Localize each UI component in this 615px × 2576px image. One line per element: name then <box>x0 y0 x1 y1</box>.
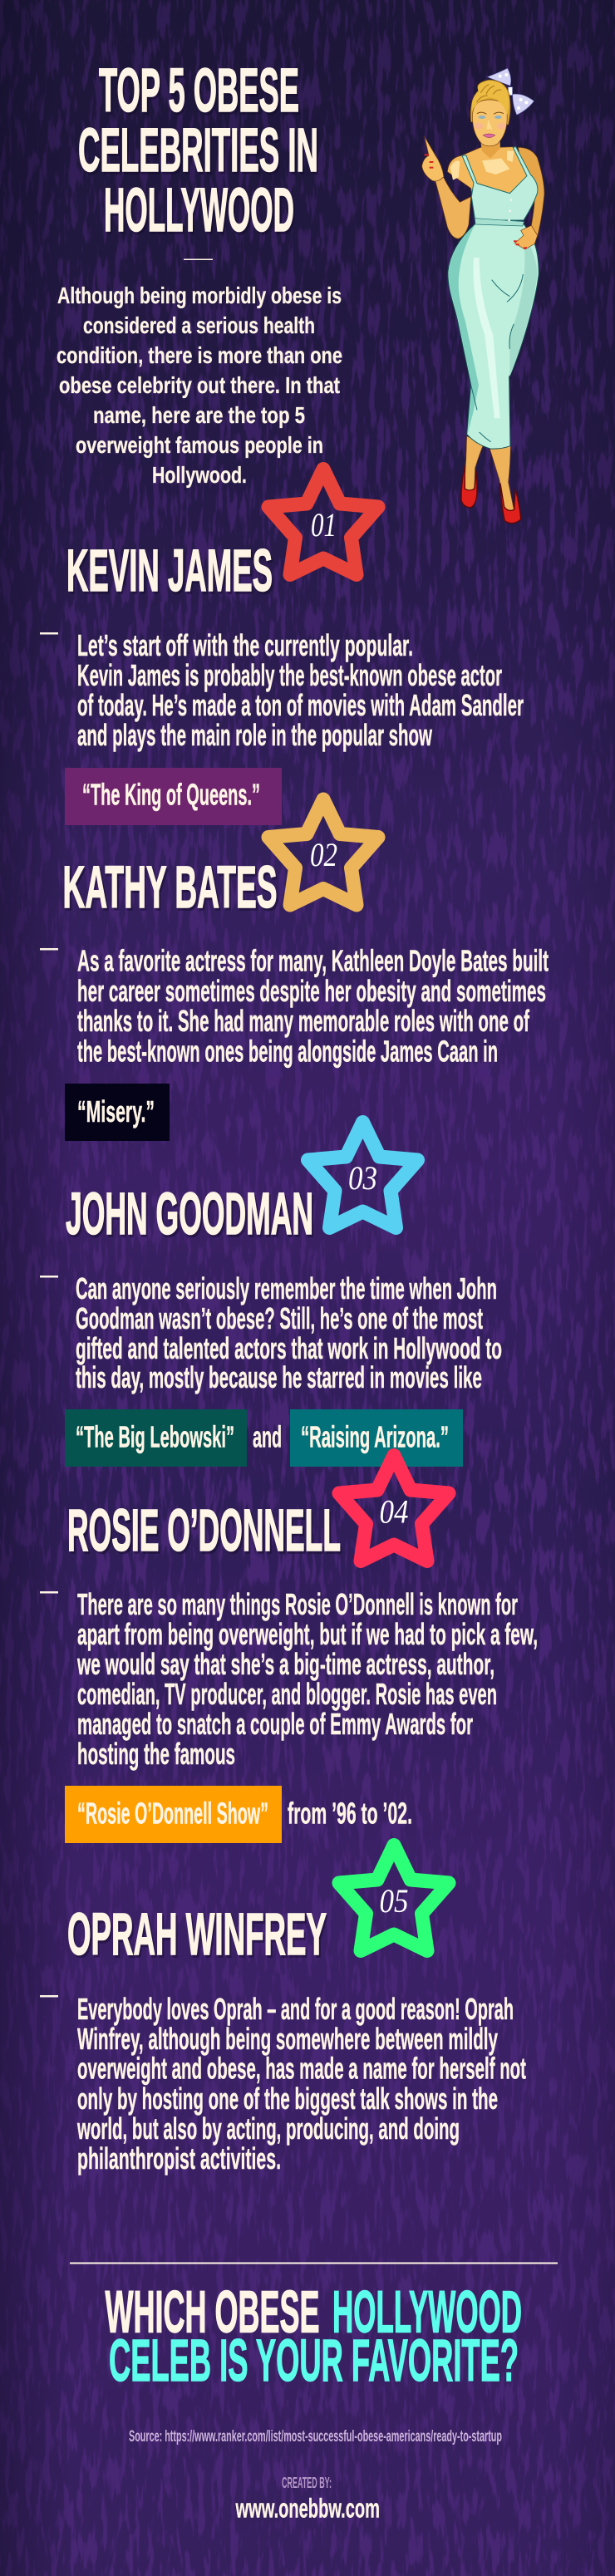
highlight: “Misery.” <box>77 1094 155 1128</box>
title: TOP 5 OBESE <box>99 56 299 125</box>
belt <box>475 219 524 226</box>
illustration: pin-up woman <box>422 68 544 524</box>
heading: KATHY BATES <box>63 855 278 921</box>
buttons <box>508 199 512 221</box>
intro text: condition, there is more than one <box>57 342 342 368</box>
shoes <box>461 465 521 524</box>
star 02 <box>268 799 378 905</box>
body: philanthropist activities. <box>77 2141 281 2175</box>
star 03 <box>308 1122 417 1228</box>
text: CREATED BY: <box>282 2475 332 2491</box>
hair front <box>471 81 509 115</box>
highlight: The Big Lebowski <box>65 1409 247 1467</box>
bow dots <box>499 73 528 110</box>
closing divider <box>70 2262 558 2264</box>
star 05 <box>339 1845 449 1951</box>
arm: hand on hip <box>518 147 544 237</box>
intro text <box>57 283 342 488</box>
nails <box>425 154 527 248</box>
heading: OPRAH WINFREY <box>67 1902 327 1968</box>
star 03: 03 <box>348 1159 377 1197</box>
star 04 <box>339 1456 449 1561</box>
intro text: Hollywood. <box>152 462 247 488</box>
heading: JOHN GOODMAN <box>66 1182 313 1247</box>
bodice <box>462 147 538 220</box>
hair back <box>470 80 510 125</box>
body <box>76 1271 502 1394</box>
body <box>76 1992 526 2175</box>
arm: raised <box>435 177 471 238</box>
skirt folds <box>471 274 523 442</box>
star 01 <box>268 469 378 575</box>
dash <box>40 632 58 635</box>
bow <box>487 68 534 115</box>
dash <box>40 1591 58 1594</box>
connector word: and <box>253 1419 282 1454</box>
intro text: Although being morbidly obese is <box>57 283 342 308</box>
closing question: WHICH OBESE <box>105 2280 319 2345</box>
highlight <box>65 1084 170 1141</box>
intro text: overweight famous people in <box>76 432 323 458</box>
heading: KEVIN JAMES <box>66 538 273 604</box>
trailing text: from ’96 to ’02. <box>288 1797 412 1830</box>
section 5: Oprah Winfrey <box>40 1845 526 2175</box>
highlight: Raising Arizona <box>290 1409 463 1467</box>
dash <box>40 1276 58 1278</box>
highlight: Raising Arizona: “Raising Arizona.” <box>301 1419 449 1454</box>
face <box>473 100 507 146</box>
website: www.onebbw.com <box>235 2493 380 2523</box>
intro text: obese celebrity out there. In that <box>59 372 340 398</box>
title divider <box>184 259 213 260</box>
closing question <box>105 2280 522 2394</box>
section 1: Kevin James <box>40 469 524 825</box>
skirt <box>448 224 539 449</box>
torso <box>447 147 530 202</box>
star 04: 04 <box>379 1492 409 1531</box>
face details <box>475 112 506 138</box>
section 4: Rosie O'Donnell <box>40 1456 538 1843</box>
star 02: 02 <box>310 836 337 873</box>
intro text: name, here are the top 5 <box>93 402 305 428</box>
hair strands <box>476 85 501 102</box>
body: hosting the famous <box>77 1737 235 1771</box>
text: CELEBRITIES IN <box>78 116 318 184</box>
raised hand <box>422 136 444 181</box>
hip hand <box>514 225 538 249</box>
star 01: 01 <box>311 506 337 543</box>
dash <box>40 1995 58 1998</box>
body <box>76 1587 538 1771</box>
title <box>78 56 318 244</box>
section 2: Kathy Bates <box>40 799 549 1141</box>
neck <box>480 137 500 159</box>
highlight <box>65 768 282 825</box>
star 05: 05 <box>379 1882 409 1920</box>
highlight: “The King of Queens.” <box>82 778 260 811</box>
body <box>77 628 524 752</box>
intro text: considered a serious health <box>83 312 315 338</box>
legs <box>465 436 514 511</box>
highlight: “Rosie O’Donnell Show” <box>77 1797 268 1830</box>
title: HOLLYWOOD <box>104 175 294 244</box>
section 3: John Goodman <box>40 1122 502 1467</box>
body <box>77 944 549 1069</box>
dash <box>40 948 58 951</box>
section 4: Rosie O'Donnell: ROSIE O’DONNELL <box>67 1498 341 1564</box>
highlight: The Big Lebowski: “The Big Lebowski” <box>76 1419 234 1454</box>
chest highlights <box>450 151 514 180</box>
highlight <box>65 1786 282 1843</box>
skirt shading <box>449 224 538 434</box>
